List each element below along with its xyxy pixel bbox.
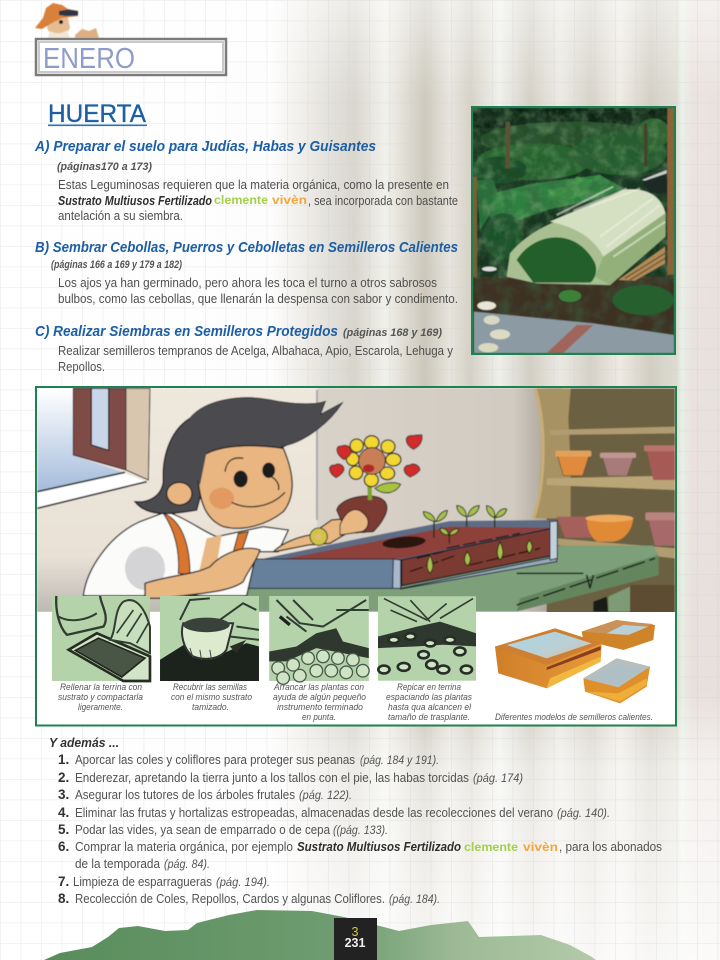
additional tasks list (49, 736, 662, 906)
additional tasks list: Recolección de Coles, Repollos, Cardos y algunas Coliflores. (75, 892, 385, 906)
additional tasks list: , para los abonados (559, 840, 662, 854)
step captions: Repicar en terrina (397, 682, 461, 693)
step captions: tamizado. (192, 702, 229, 713)
tray with soil and seedlings (240, 506, 557, 589)
step captions: ligeramente. (78, 702, 123, 713)
additional tasks list: 2. (58, 770, 69, 785)
ear (167, 482, 192, 505)
text block A: , sea incorporada con bastante (308, 194, 458, 208)
list heading: Y además ... (49, 736, 119, 750)
shirt (83, 512, 288, 596)
wall (37, 388, 327, 612)
back right frame (582, 620, 655, 650)
additional tasks list: Eliminar las frutas y hortalizas estropeadas, almacenadas desde las recolecciones del verano (75, 806, 553, 820)
boy (83, 398, 370, 598)
face (197, 446, 292, 528)
step captions: con el mismo sustrato (171, 692, 252, 703)
step captions: Recubrir las semillas (173, 682, 247, 693)
section heading: Huerta: HUERTA (48, 100, 146, 128)
hair top over face (189, 398, 342, 485)
additional tasks list: Asegurar los tutores de los árboles frutales (75, 788, 295, 802)
cheek, eyes, smile (209, 488, 234, 509)
additional tasks list: 3. (58, 787, 69, 802)
pots (557, 455, 589, 476)
text block C (35, 323, 454, 374)
additional tasks list: Aporcar las coles y coliflores para proteger sus peanas (75, 753, 355, 767)
additional tasks list: Enderezar, apretando la tierra junto a los tallos con el pie, las habas torcidas (75, 771, 469, 785)
text block B: bulbos, como las cebollas, que llenarán la despensa con sabor y condimento. (58, 292, 458, 306)
additional tasks list: clemente (464, 842, 518, 854)
seedlings (423, 506, 532, 573)
additional tasks list: 4. (58, 805, 69, 820)
additional tasks list: (pág. 122). (299, 790, 352, 802)
bench (240, 546, 675, 615)
step captions: ayuda de algún pequeño (273, 692, 366, 703)
seedbed caption: Diferentes modelos de semilleros calientes. (495, 712, 653, 723)
bracelet flower (310, 528, 327, 545)
additional tasks list: (pág. 184 y 191). (360, 755, 439, 767)
additional tasks list: vivèn (523, 840, 558, 854)
heated seedbed models (495, 620, 655, 703)
front large frame (495, 628, 602, 688)
text block A: Estas Leguminosas requieren que la materia orgánica, como la presente en (58, 178, 449, 192)
heading B: B) Sembrar Cebollas, Puerros y Cebolletas en Semilleros Calientes (35, 239, 458, 256)
footer green hill (44, 910, 596, 960)
step captions: en punta. (302, 712, 336, 723)
text block A: antelación a su siembra. (58, 209, 183, 223)
text block A: clemente (214, 195, 268, 207)
photo: plastic tunnel in vegetable garden (471, 106, 676, 355)
heading C: C) Realizar Siembras en Semilleros Protegidos (35, 323, 338, 340)
arm and hand (145, 548, 260, 598)
icon: farmer mascot with hat (35, 3, 99, 38)
window (37, 388, 150, 508)
cartoon scene: boy planting seedlings (37, 388, 675, 612)
page number box: 231 (345, 936, 365, 950)
text block A (34, 138, 458, 223)
right hand (340, 510, 368, 535)
text block A: (páginas170 a 173) (57, 161, 152, 173)
step captions: espaciando las plantas (386, 692, 472, 703)
sunflower and hearts (330, 435, 422, 535)
additional tasks list: 7. (58, 874, 69, 889)
step 2: cover seeds sketch (160, 596, 260, 681)
additional tasks list: Sustrato Multiusos Fertilizado (297, 840, 461, 854)
additional tasks list: (pág. 140). (557, 808, 610, 820)
additional tasks list: 8. (58, 891, 69, 906)
text block C: Realizar semilleros tempranos de Acelga, Albahaca, Apio, Escarola, Lehuga y (58, 344, 454, 358)
additional tasks list: Podar las vides, ya sean de emparrado o de cepa (75, 823, 330, 837)
step captions: sustrato y compactarla (58, 692, 143, 703)
text block A: Sustrato Multiusos Fertilizado (58, 194, 212, 208)
additional tasks list: (pág. 184). (389, 894, 440, 906)
text block C: (páginas 168 y 169) (343, 327, 442, 339)
illustration panel frame (36, 387, 676, 726)
page number box: 3 (352, 925, 359, 939)
additional tasks list: 1. (58, 752, 69, 767)
additional tasks list: 5. (58, 822, 69, 837)
additional tasks list: de la temporada (75, 857, 160, 871)
step 1: fill tray sketch (52, 596, 152, 682)
step captions: Arrancar las plantas con (273, 682, 364, 693)
page number box (334, 918, 377, 960)
month title box (36, 39, 226, 75)
text block B (35, 239, 458, 306)
small front frame (583, 658, 650, 703)
step 4: transplant sketch (377, 596, 476, 681)
hair back (135, 398, 342, 514)
step captions: instrumento terminado (277, 702, 363, 713)
month title: ENERO (43, 43, 135, 75)
additional tasks list: (pág. 84). (164, 859, 210, 871)
step captions (58, 682, 472, 723)
additional tasks list: (pág. 174) (473, 773, 523, 785)
shelves with flower pots (533, 388, 675, 615)
step 3: pull seedlings sketch (269, 596, 370, 685)
foliage and soil texture (473, 108, 674, 335)
text block B: (páginas 166 a 169 y 179 a 182) (51, 259, 182, 271)
additional tasks list: Comprar la materia orgánica, por ejemplo (75, 840, 293, 854)
additional tasks list: 6. (58, 839, 69, 854)
heading A: A) Preparar el suelo para Judías, Habas y Guisantes (34, 138, 376, 155)
additional tasks list: ((pág. 133). (333, 825, 388, 837)
text block B: Los ajos ya han germinado, pero ahora les toca el turno a otros sabrosos (58, 276, 437, 290)
step captions: Rellenar la terrina con (60, 682, 142, 693)
text block C: Repollos. (58, 360, 105, 374)
text block A: vivèn (272, 193, 307, 207)
step captions: hasta qua alcancen el (388, 702, 472, 713)
additional tasks list: Limpieza de esparragueras (73, 875, 212, 889)
additional tasks list: (pág. 194). (216, 877, 270, 889)
step captions: tamaño de trasplante. (388, 712, 470, 723)
